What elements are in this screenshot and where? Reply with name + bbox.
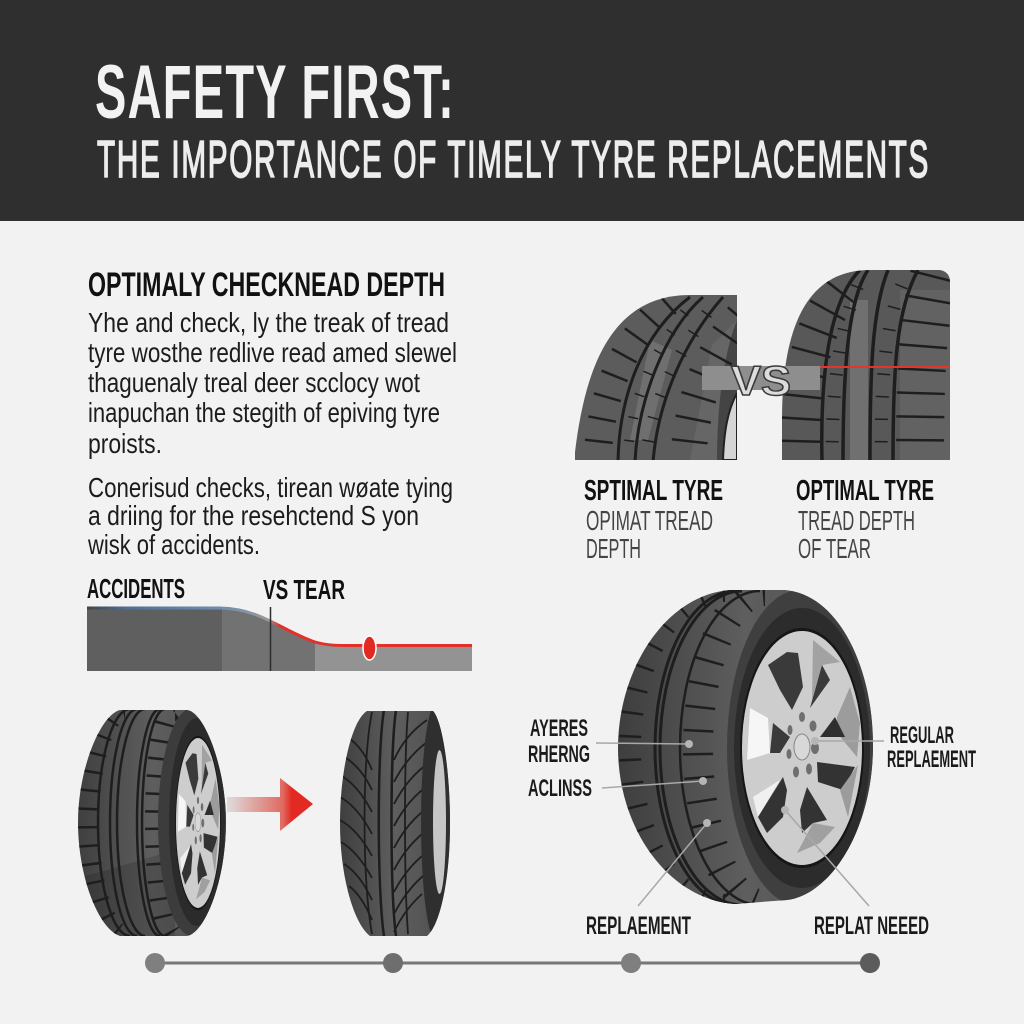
second paragraph: wisk of accidents. <box>87 529 260 560</box>
tyre comparison <box>570 268 952 564</box>
wear curve <box>87 608 472 646</box>
chart labels <box>87 573 345 605</box>
second paragraph <box>87 472 453 560</box>
right tyre caption <box>796 475 934 564</box>
callout: aclinss: ACLINSS <box>528 775 592 802</box>
panel: tread depth text <box>87 266 457 560</box>
callout: replaement: REPLAEMENT <box>586 912 691 940</box>
first paragraph: tyre wosthe redlive read amed slewel <box>88 337 457 368</box>
callout: regular replaement <box>811 722 976 773</box>
callout: replaement <box>586 819 711 940</box>
chart bands <box>87 607 472 671</box>
small wheel <box>175 736 221 910</box>
first paragraph: thaguenaly treal deer scclocy wot <box>88 367 420 398</box>
replacement arrow <box>227 778 313 831</box>
callout: ayeres bherng: RHERNG <box>528 741 590 768</box>
right tyre caption: TREAD DEPTH <box>798 505 915 536</box>
right tyre crop <box>780 268 952 465</box>
large tyre with labels <box>528 585 976 940</box>
chart marker tick <box>270 607 272 671</box>
tread wear chart <box>87 573 472 671</box>
header banner <box>0 0 1024 221</box>
red wear marker <box>363 636 376 660</box>
left tyre caption: DEPTH <box>586 533 641 564</box>
timeline <box>145 953 880 973</box>
left tyre crop <box>575 295 737 460</box>
vs badge <box>702 357 820 404</box>
new tyre illustration <box>340 711 450 936</box>
right tyre caption: OF TEAR <box>798 533 871 564</box>
callout: replat neeed: REPLAT NEEED <box>814 912 929 940</box>
first paragraph: Yhe and check, ly the treak of tread <box>88 307 449 338</box>
old tyre illustration <box>78 710 226 936</box>
callout: regular replaement: REGULAR <box>890 722 954 749</box>
second paragraph: a driing for the resehctend S yon <box>88 500 419 531</box>
callout: ayeres bherng <box>528 715 693 768</box>
left tyre caption <box>584 475 723 564</box>
first paragraph: inapuchan the stegith of epiving tyre <box>88 397 440 428</box>
callout: aclinss <box>528 775 707 802</box>
left tyre caption: SPTIMAL TYRE <box>584 475 723 507</box>
right tyre caption: OPTIMAL TYRE <box>796 475 934 507</box>
chart labels: ACCIDENTS <box>87 573 185 604</box>
callout: replat neeed <box>781 806 929 940</box>
large tyre <box>610 585 880 910</box>
second paragraph: Conerisud checks, tirean wøate tying <box>88 472 453 503</box>
chart labels: VS TEAR <box>263 574 345 605</box>
callout: ayeres bherng: AYERES <box>530 715 588 742</box>
first paragraph: proists. <box>88 428 162 459</box>
title: SAFETY FIRST: <box>95 50 455 135</box>
heading: OPTIMALY CHECKNEAD DEPTH <box>88 266 445 304</box>
left tyre caption: OPIMAT TREAD <box>586 505 713 536</box>
vs badge: VS <box>731 357 791 404</box>
first paragraph <box>88 307 457 459</box>
narrow wheel <box>433 750 446 894</box>
